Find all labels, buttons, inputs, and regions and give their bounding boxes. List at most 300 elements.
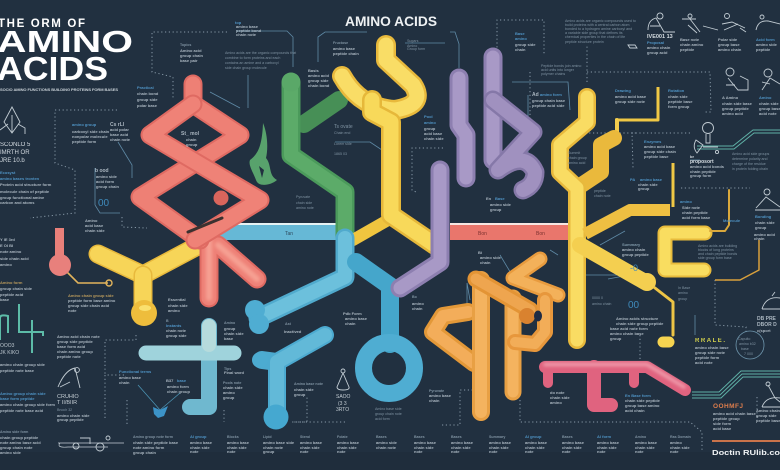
block: right of plus: Amino — [224, 321, 236, 325]
block: far right small: group side — [756, 413, 777, 418]
block: right of plus low: chain side — [223, 385, 243, 390]
block: left lower one: Y IE 3rd — [0, 237, 15, 242]
block: paragraph top: combine to form proteins and each — [225, 56, 280, 60]
block: between purple and yellow: group side — [515, 42, 536, 47]
block: label c: group chain — [96, 184, 119, 189]
block: left of purple: acid base — [424, 131, 443, 136]
block: label b: acid polar — [110, 127, 129, 132]
block: left of purple: Pool — [424, 114, 433, 119]
footer text row: amino base — [489, 440, 512, 445]
block: top paragraph right: peptide structure protein — [565, 40, 604, 44]
block: right below: chain peptide — [682, 210, 709, 215]
title line three: ACIDS — [0, 50, 108, 87]
block: under yellow heading: peptide form — [695, 355, 720, 360]
block: label d: Amino — [85, 218, 98, 223]
block: left labels: IMRTH OR — [0, 150, 30, 156]
icon: flask — [337, 369, 349, 390]
footer text row: amino base — [227, 440, 250, 445]
block: yellow lower label: peptide — [594, 189, 606, 193]
block: far right labels: DB PRE — [757, 316, 777, 322]
block: under pink right: En Base form — [625, 393, 651, 398]
block: lower left of ring: acid form — [375, 417, 390, 421]
block: small mid: Lorem side — [334, 142, 352, 146]
block: icon captions second row: A Amino — [722, 95, 739, 100]
block: left mid text: chain bond — [137, 91, 159, 96]
block: top paragraph right: a variable side group that defines its — [565, 31, 623, 35]
icon: amino leaf top left — [0, 107, 25, 134]
block: top text two: amino base — [236, 24, 259, 29]
icon: right bell — [762, 292, 780, 309]
footer text row: Lipid — [263, 435, 272, 439]
block: center title in helix: St_ mol — [181, 131, 200, 137]
block: left yellow paragraph: note — [68, 308, 77, 313]
block: top icon captions: peptide — [756, 47, 771, 52]
tube: yellow lower left — [98, 242, 205, 326]
footer text row: Sterol — [300, 435, 310, 439]
block: under big sign: OOO3 — [0, 343, 15, 349]
block: right of red arm: Ast — [285, 322, 292, 326]
block: lower yellow block: chain side — [638, 182, 658, 187]
block: far right small: peptide base — [756, 418, 780, 423]
block: small mid: Chain end — [334, 131, 350, 135]
block: plus left top: Essential — [168, 297, 186, 302]
block: lower left of ring: group chain note — [375, 412, 402, 416]
leaf — [250, 123, 277, 185]
block: under yellow heading: amino chain base — [695, 345, 729, 350]
block: left lower blue: peptide note base — [0, 368, 35, 373]
yellow heading: RRALE. — [695, 338, 725, 344]
block: flask text: 3RTO — [336, 407, 349, 413]
block: label a: amino group — [72, 122, 97, 127]
block: top icon captions: chain amino — [680, 42, 704, 47]
block: mid arrow label: amino form — [167, 384, 189, 389]
block: between purple and yellow: chain — [515, 47, 526, 52]
block: yellow inner: chain group — [568, 156, 587, 160]
block: right of red arm: Inactived — [284, 329, 302, 334]
tube: blue bar — [218, 223, 346, 240]
footer text row: Bases — [562, 435, 573, 439]
icon: far right molecule — [755, 189, 780, 210]
title line two: AMINO — [0, 24, 133, 59]
block: text three: Topics — [180, 43, 191, 47]
block: E paragraph: and chain peptide bonds — [698, 252, 737, 256]
block: right of blue column: group — [294, 392, 306, 397]
tube: red bar: Bon — [478, 231, 487, 237]
block: center yellow K labels: amino chain — [622, 247, 646, 252]
block: under orange heading: side form — [713, 421, 731, 426]
block: left lower blue: Amino group chain side — [0, 391, 46, 396]
block: between purple and yellow: amino — [515, 36, 527, 41]
block: left lower blue: amino chain group side — [0, 362, 46, 367]
block: lower mid label: Pyruvate — [429, 389, 444, 393]
footer text row: chain side — [670, 445, 690, 450]
block: purple right: Peptide bonds join amino — [541, 64, 581, 68]
footer text row: amino — [670, 440, 682, 445]
block: left lower one: peptide acid — [0, 292, 24, 297]
block: label c: amino side — [96, 174, 118, 179]
center heading: AMINO ACIDS — [345, 14, 437, 29]
block: upper center: amino base — [333, 46, 356, 51]
block: right icons column text: group — [755, 225, 767, 230]
block: above red bar: amino side — [490, 202, 512, 207]
block: under pink left: amino — [550, 400, 562, 405]
block: above pink: group — [678, 297, 687, 301]
tube: red bar — [450, 223, 572, 240]
block: purple right: acid units into longer — [541, 68, 575, 72]
teal connector lines — [692, 130, 780, 398]
block: paragraph top: contains an amine and a carboxyl — [225, 61, 279, 65]
footer text row: group chain — [133, 450, 156, 455]
title block — [0, 18, 133, 92]
number 0 near K: -0 — [630, 263, 638, 273]
block: orange left label: chain — [412, 306, 423, 311]
block: flask text: SAOO — [336, 394, 351, 400]
block: top icon captions: group base — [718, 42, 740, 47]
chain diagram bottom — [58, 436, 124, 451]
tube: orange — [433, 259, 558, 412]
footer text row: Amino — [635, 435, 647, 439]
block: right of plus low: group — [223, 395, 235, 400]
block: lower left of ring: Amino base side — [375, 407, 402, 411]
block: right label: br — [690, 154, 694, 159]
footer text row: group chain note — [0, 445, 33, 450]
block: left text one: amino bases tronten — [0, 176, 40, 181]
footer text row: Amino side form — [0, 430, 28, 434]
block: label c: b ood — [95, 168, 109, 174]
block: right of plus low: amino — [223, 390, 235, 395]
red bulb with stem — [49, 228, 112, 286]
block: mid purple right: Ad — [532, 92, 539, 98]
block: right of plus: base — [224, 336, 234, 341]
block: above red bar: Base — [495, 196, 505, 201]
block: left lower one: side chain acid — [0, 256, 29, 261]
block: between purple and yellow: Base — [515, 31, 525, 36]
footer text row: note — [635, 449, 644, 454]
footer text row: amino base — [414, 440, 437, 445]
block: left text one: Protein acid structure form — [0, 182, 52, 187]
block: right paragraph: charge of the residue — [732, 162, 766, 166]
footer rule — [712, 440, 780, 442]
block: top icon captions: Polar side — [718, 37, 738, 42]
block: right paragraph: determine polarity and — [732, 157, 768, 161]
footer text row: note — [414, 449, 423, 454]
block: upper right of yellow: Amino — [407, 44, 417, 48]
block: plus left top: chain side — [168, 303, 188, 308]
block: right of blue column: Amino base note — [294, 382, 323, 386]
block: right label: chain peptide — [690, 169, 717, 174]
block: under pink right: group base amino — [625, 403, 660, 408]
block: right below: Side note — [682, 205, 701, 210]
block: above pink: In Base — [678, 286, 690, 290]
circle note — [736, 331, 764, 359]
big number sign — [0, 304, 43, 353]
block: right paragraph: Amino acid side groups — [732, 152, 770, 156]
block: under orange heading: acid base — [713, 426, 732, 431]
tube: blue lower structure — [245, 238, 414, 430]
block: under yellow heading: group side note — [695, 350, 726, 355]
block: left of 00: amino chain — [592, 302, 611, 306]
block: left of purple: chain side — [424, 136, 444, 141]
footer text row: Ras Domain — [670, 435, 691, 439]
block: plus left: group side — [166, 333, 187, 338]
block: label top right group: Rotation — [668, 88, 685, 93]
block: right of green: chain bond — [308, 83, 330, 88]
block: top icon captions: peptide — [680, 47, 695, 52]
block: right icons column text: Bonding — [755, 214, 772, 219]
block: E paragraph: blocks of long proteins — [698, 248, 734, 252]
block: left mid text: polar base — [137, 103, 158, 108]
footer text row: amino base — [190, 440, 213, 445]
tube: yellow center knot — [342, 45, 435, 245]
block: top icon captions: Base note — [680, 37, 700, 42]
block: left text one: carbon and atoms — [0, 200, 35, 205]
block: small mid: Ts ovate — [334, 124, 353, 130]
footer text row: Al form — [597, 434, 611, 439]
block: left of 00: 0000 0 — [592, 296, 603, 300]
block: icon captions second row: chain side base — [722, 101, 753, 106]
block: right of blue column: chain side — [294, 387, 314, 392]
block: right below: amino — [680, 199, 692, 204]
footer text row: note — [562, 449, 571, 454]
block: icon captions second row: group base — [759, 106, 780, 111]
block: under orange heading: peptide group — [713, 416, 740, 421]
footer text row: chain side — [451, 445, 471, 450]
block: label top right group: peptide base — [668, 99, 693, 104]
footer text row: chain side — [562, 445, 582, 450]
block: small blue right: amino base — [345, 316, 368, 321]
tube: plus shape — [146, 326, 234, 407]
block: left lower one: E OI BI — [0, 243, 13, 248]
block: top paragraph right: chemical properties in the chain of life — [565, 35, 625, 39]
block: paragraph top: Amino acids are the organic compounds that — [225, 51, 296, 55]
tube: blue bar: Tan — [285, 231, 293, 237]
block: label b: base acid — [110, 132, 129, 137]
block: top text two: top — [235, 20, 242, 25]
icon: keyhole gauge — [694, 122, 719, 154]
block: flask text: (3 3 — [338, 401, 347, 407]
block: text three: base pair — [180, 58, 198, 63]
block: top icon captions: IVE001 13 — [647, 34, 673, 40]
block: left lower blue: peptide note base acid — [0, 408, 44, 413]
block: lower mid label: amino base — [429, 393, 452, 398]
block: quill text: Bnoch 32 — [57, 408, 72, 412]
block: paragraph lower: Amino acid chain note — [57, 334, 100, 339]
block: under pink right: chain side peptide — [625, 398, 661, 403]
footer text row: note amino form — [133, 445, 165, 450]
block: upper right of yellow: Group form — [407, 47, 425, 51]
block: under yellow heading: acid note — [695, 360, 713, 365]
tube: pink — [545, 364, 685, 405]
block: top icon captions: group acid — [647, 50, 668, 55]
block: center yellow K labels: Summary — [622, 242, 641, 247]
circle note: base — [741, 347, 749, 351]
footer text row: amino base — [300, 440, 323, 445]
tube: yellow right — [560, 87, 759, 342]
block: label b: Cs rLI — [110, 122, 125, 128]
title line one: THE ORM OF — [0, 18, 85, 30]
block: orange top left: amino side — [480, 255, 502, 260]
block: left of purple: group — [424, 126, 436, 131]
block: above red bar: En — [486, 196, 492, 201]
footer text row: note — [300, 449, 309, 454]
block: text under yellow branch: amino acid base — [644, 144, 676, 149]
icons: top row — [628, 13, 780, 90]
block: left mid text: Practical — [137, 85, 154, 90]
footer text row: chain side — [525, 445, 545, 450]
block: above red bar: group — [490, 207, 502, 212]
block: right of plus: group — [224, 326, 236, 331]
block: right label: amino acid bonds — [690, 164, 725, 169]
block: label d: acid base — [85, 223, 104, 228]
block: left mid text: group side — [137, 97, 158, 102]
subtitle: SOCIO AMINO FUNCTIONS BUILDING PROTEINS FORM BASES — [0, 87, 118, 92]
footer text row: Blocks — [227, 435, 239, 439]
block: plus left: chain note — [166, 328, 187, 333]
block: text three: group chain — [180, 53, 203, 58]
block: top icon captions: amino chain — [718, 47, 742, 52]
block: right label: group form — [690, 173, 712, 178]
block: far right small: Amino chain — [756, 408, 780, 413]
icon: arrow chart blue — [138, 385, 180, 418]
block: mid arrow label: base — [177, 378, 187, 383]
block: left yellow paragraph: group side chain acid — [68, 303, 110, 308]
block: top right corner lines: chain — [754, 236, 765, 241]
tube: purple — [400, 57, 535, 288]
block: paragraph lower: peptide note — [57, 354, 82, 359]
block: mid arrow label: chain group — [167, 389, 190, 394]
block: green lower: chain side — [296, 201, 312, 205]
block: upper center: Fructose — [333, 41, 348, 45]
block: right of plus low: Final word — [224, 370, 245, 375]
block: above pink: amino — [678, 291, 688, 295]
block: orange top left: Bi — [478, 250, 482, 255]
block: icon captions second row: amino acid — [722, 111, 743, 116]
footer text row: chain side — [489, 445, 509, 450]
footer text row: chain side — [300, 445, 320, 450]
block: right below: acid form base — [682, 215, 711, 220]
block: quill text small: group peptide — [57, 417, 84, 422]
block: far right labels: DBOR D — [757, 322, 777, 328]
block: green lower: Pyruvate — [296, 195, 310, 199]
footer text row: Al group — [190, 434, 207, 439]
block: right of plus low: Pools note — [223, 381, 241, 385]
footer text row: chain note — [376, 445, 397, 450]
block: icon captions second row: Amino — [759, 95, 772, 100]
block: label a: peptide form — [72, 139, 97, 144]
block: right icons column text: chain side — [755, 220, 775, 225]
block: lower mid label: chain — [429, 398, 440, 403]
tube: red bar: Bon — [536, 231, 545, 237]
block: right of green: group side — [308, 78, 329, 83]
block: icon captions second row: group peptide — [722, 106, 749, 111]
block: left lower one: note amino — [0, 249, 22, 254]
number 00 left: 00 — [98, 198, 110, 209]
block: left text one: molecule chain of peptide — [0, 189, 50, 194]
footer text row: note — [489, 449, 498, 454]
footer text row: amino base — [337, 440, 360, 445]
footer text row: note — [670, 449, 679, 454]
block: under pink right: acid chain — [625, 408, 645, 413]
block: center title in helix: chain — [186, 137, 197, 142]
block: left lower one: amino — [0, 262, 12, 267]
block: right icons column text: Molecule — [723, 218, 741, 223]
block: label top right group: form group — [668, 104, 690, 109]
block: plus lower left: Functional terms — [119, 369, 152, 374]
circle note: 7 000 — [744, 352, 753, 356]
block: yellow lower label: chain note — [594, 194, 611, 198]
block: top icon captions: Acid form — [756, 37, 775, 42]
number 00 right: 00 — [628, 300, 640, 311]
footer text row: note — [227, 449, 236, 454]
block: plus left: B — [166, 319, 169, 323]
block: top paragraph right: build proteins with a central carbon atom — [565, 23, 630, 27]
block: lower yellow block: PA — [630, 177, 635, 182]
block: orange top left: chain — [480, 260, 491, 265]
footer text row: note — [190, 449, 199, 454]
block: upper right of yellow: Sugars — [407, 39, 419, 43]
footer brand: Doctin RUlib.co — [712, 448, 780, 457]
block: left yellow paragraph: Amino chain group side — [68, 293, 114, 298]
icon: lower right molecule — [762, 382, 780, 407]
footer text row: group — [263, 449, 275, 454]
block: label a: carboxyl side chain — [72, 129, 110, 134]
footer text row: Al group — [525, 434, 542, 439]
block: paragraph lower: chain amino group — [57, 349, 93, 354]
block: label b: chain note — [110, 137, 131, 142]
block: K lower para: chain side group peptide — [616, 321, 664, 326]
block: K lower para: Amino acids structure — [616, 316, 659, 321]
block: top icon captions: amino side — [756, 42, 778, 47]
block: lower yellow block: amino base — [640, 177, 663, 182]
block: right label: proposort — [690, 159, 714, 165]
circle note: Capulto — [738, 337, 750, 341]
block: lower yellow block: group — [638, 186, 650, 191]
orange heading: OOHMFJ — [713, 403, 743, 410]
block: left lower one: base — [0, 297, 10, 302]
block: left labels: SCONLO 5 — [0, 142, 31, 148]
block: plus lower left: amino base — [119, 375, 142, 380]
footer text row: chain side peptide base — [133, 440, 179, 445]
footer text row: chain group peptide — [0, 435, 39, 440]
block: icon captions second row: chain side — [759, 101, 779, 106]
block: right of plus: chain side — [224, 331, 244, 336]
block: top right corner lines: amino acid — [754, 232, 775, 237]
block: left text one: group functional amine — [0, 195, 45, 200]
block: top icon captions: Proposal — [647, 40, 664, 45]
footer text row: Amino group note form — [133, 435, 173, 439]
footer text row: chain side — [597, 445, 617, 450]
block: purple right: polymer chains — [541, 72, 565, 76]
block: under big sign: JK KIKO — [0, 350, 19, 356]
block: small blue right: Pdb Form — [343, 311, 362, 316]
footer text row: amino side — [376, 440, 398, 445]
block: plus left top: amino — [168, 308, 180, 313]
block: icon captions second row: acid note — [759, 111, 777, 116]
block: mid purple right: group chain base — [532, 98, 566, 103]
tube: red helix — [140, 84, 260, 298]
block: text under yellow branch: peptide base — [644, 154, 669, 159]
footer text row: amino base — [525, 440, 548, 445]
block: plus left: Instants — [166, 323, 182, 328]
block: K lower para: amino chain base — [610, 331, 644, 336]
block: mid purple right: amino form — [540, 92, 562, 97]
footer text row: Folate — [337, 435, 348, 439]
block: green lower: amino note — [296, 206, 314, 210]
block: top icon captions: amino chain — [647, 45, 671, 50]
footer text row: amino base — [451, 440, 474, 445]
block: orange left label: Bo — [412, 295, 418, 299]
block: top text two: peptide bond — [236, 28, 262, 33]
